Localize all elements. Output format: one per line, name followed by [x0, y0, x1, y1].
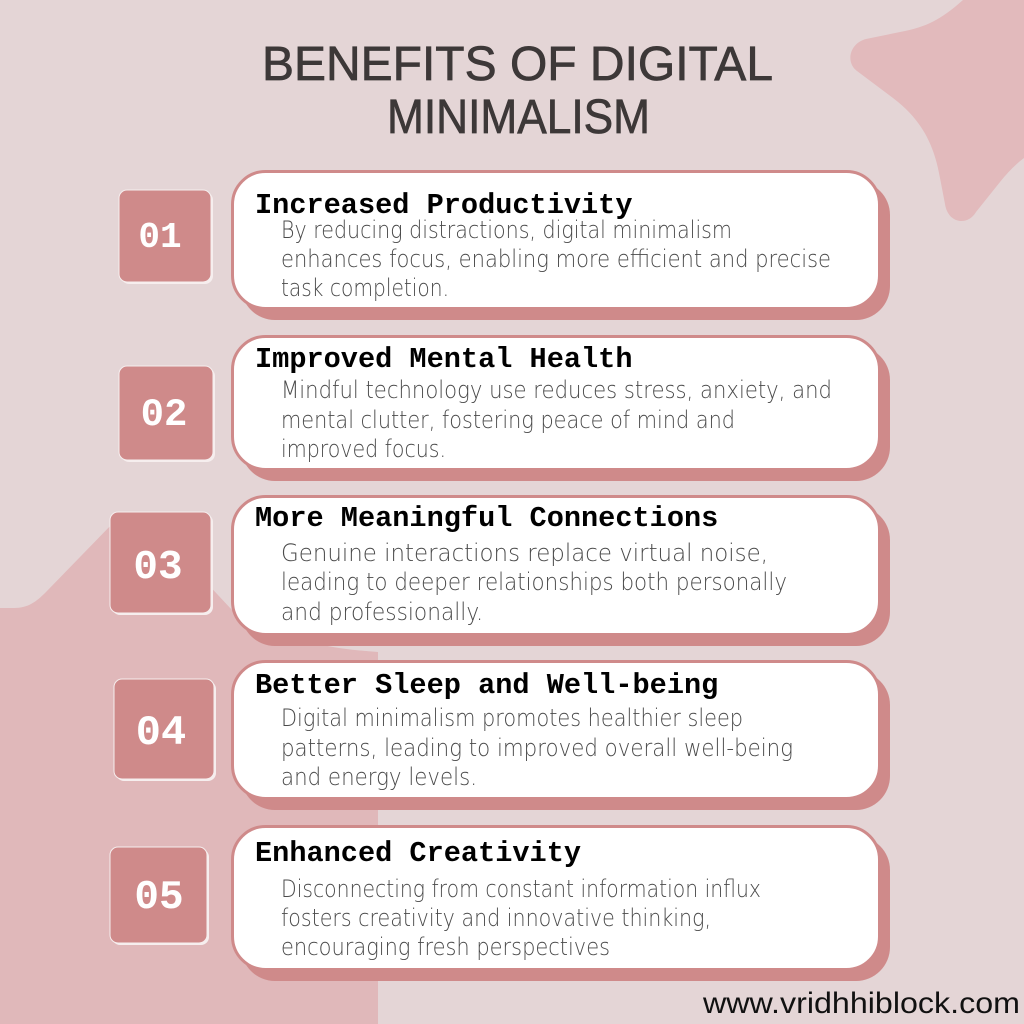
card 03: Genuine interactions replace virtual noise,: [281, 539, 768, 567]
card 03: and professionally.: [281, 598, 483, 626]
number badge 03: [110, 512, 213, 615]
card 05: encouraging fresh perspectives: [281, 933, 610, 961]
blob: top right: [850, 0, 1024, 221]
card 02: mental clutter, fostering peace of mind and: [281, 406, 735, 434]
card 01: Increased Productivity: [255, 189, 632, 222]
card 01: task completion.: [281, 274, 449, 302]
card 03: More Meaningful Connections: [255, 502, 718, 535]
number badge 05: [110, 847, 209, 945]
number badge 05: 05: [134, 875, 184, 921]
card 04: Better Sleep and Well-being: [255, 669, 718, 702]
panel: benefit 05: [110, 826, 890, 981]
number badge 04: [114, 679, 216, 781]
card 04: [232, 662, 890, 810]
panel: benefit 03: [110, 496, 890, 646]
card 02: Mindful technology use reduces stress, anxiety, and: [281, 376, 832, 404]
number badge 01: 01: [138, 217, 182, 258]
title: [262, 38, 773, 144]
number badge 02: 02: [141, 393, 187, 437]
card 01: By reducing distractions, digital minimalism: [281, 216, 732, 244]
card 02: Improved Mental Health: [255, 343, 632, 376]
card 05: fosters creativity and innovative thinking,: [281, 904, 711, 932]
card 02: improved focus.: [281, 435, 446, 463]
panel: benefit 04: [114, 662, 890, 810]
panel: benefit 02: [119, 336, 890, 481]
title: BENEFITS OF DIGITAL: [262, 38, 773, 91]
number badge 03: 03: [133, 545, 183, 591]
card 05: [232, 826, 890, 981]
card 05: Enhanced Creativity: [255, 837, 581, 870]
card 04: and energy levels.: [281, 763, 477, 791]
number badge 01: [119, 190, 213, 284]
panel: benefit 01: [119, 172, 890, 320]
card 03: leading to deeper relationships both personally: [281, 568, 787, 596]
blob: bottom left: [0, 512, 378, 1024]
website url: www.vridhhiblock.com: [702, 987, 1020, 1020]
card 01: enhances focus, enabling more efficient and precise: [281, 245, 831, 273]
number badge 04: 04: [136, 709, 186, 757]
card 05: Disconnecting from constant information influx: [281, 875, 761, 903]
card 01: [232, 172, 890, 320]
card 03: [232, 496, 890, 646]
card 02: [232, 336, 890, 481]
title: MINIMALISM: [387, 91, 650, 144]
card 04: Digital minimalism promotes healthier sleep: [281, 704, 743, 732]
card 04: patterns, leading to improved overall well-being: [281, 734, 793, 762]
number badge 02: [119, 366, 215, 462]
